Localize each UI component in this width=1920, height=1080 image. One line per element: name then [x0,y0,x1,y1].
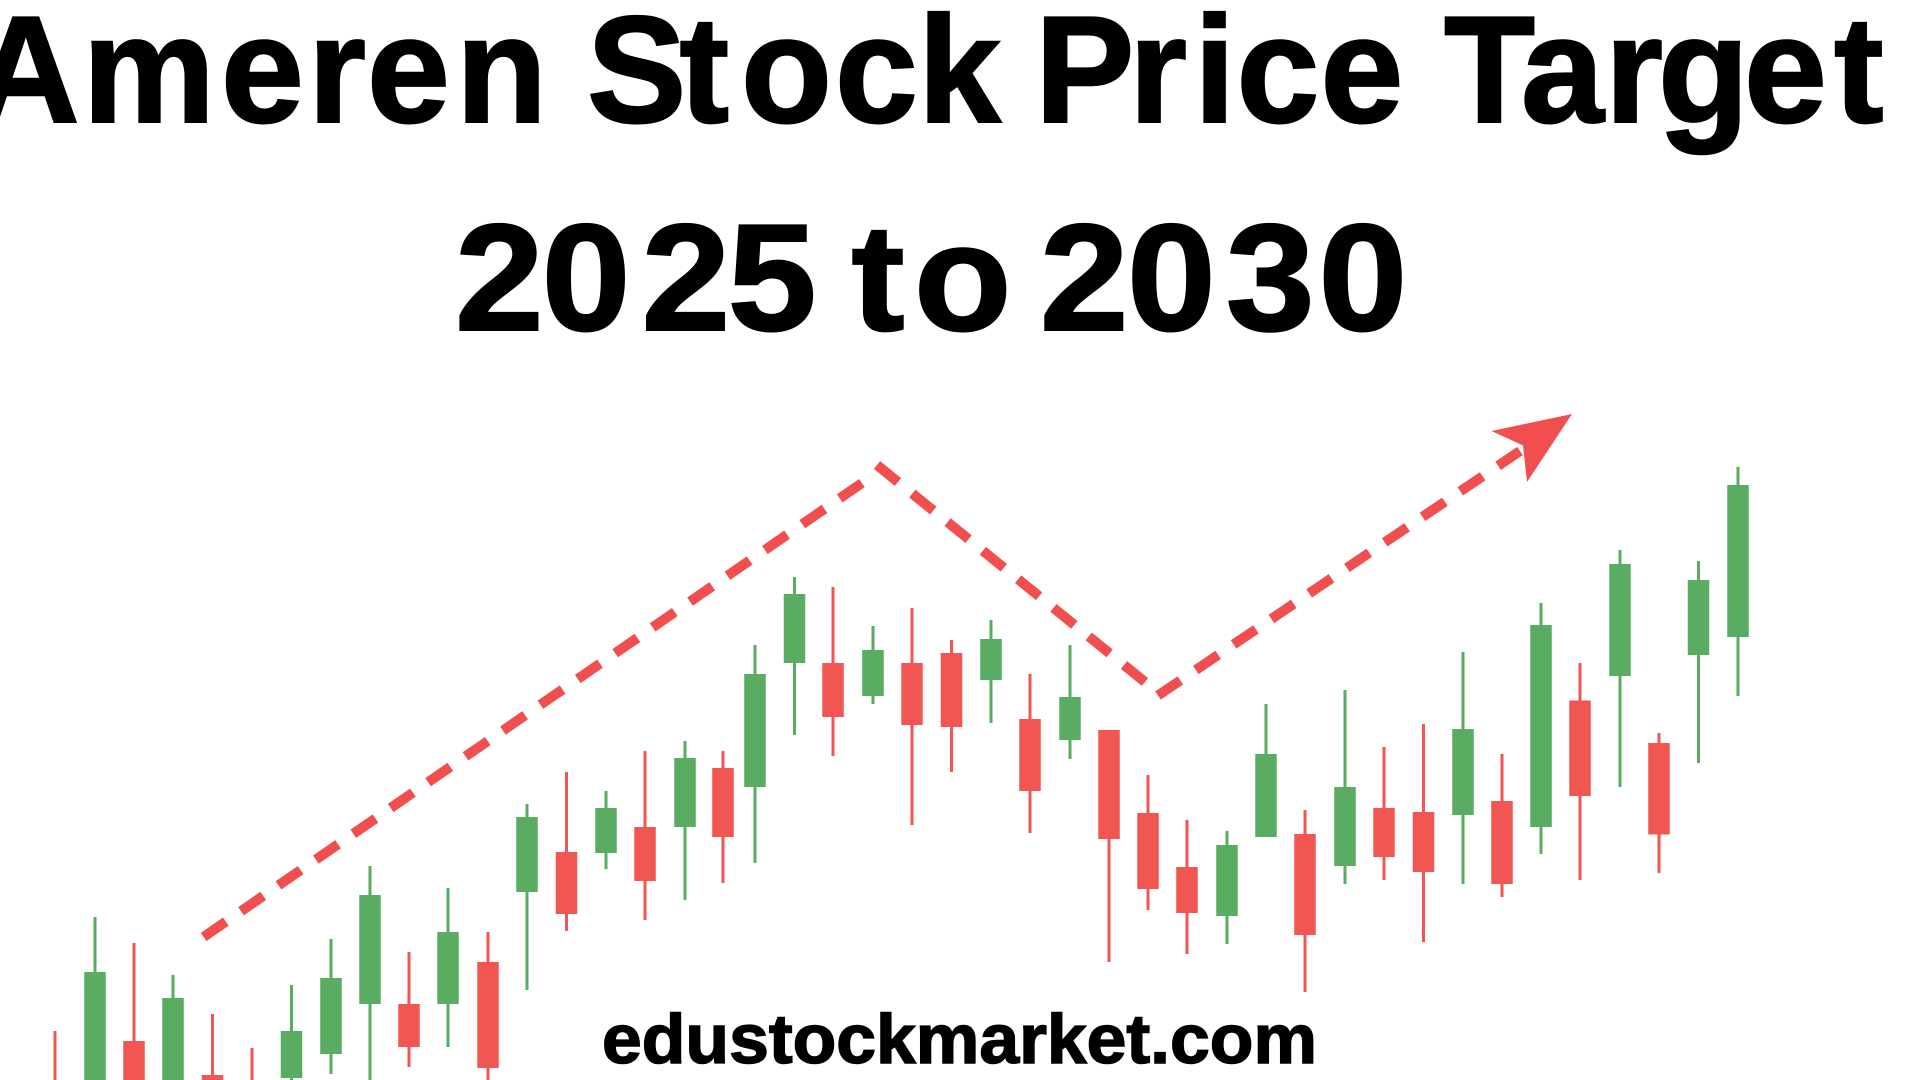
title: 2025 to 2030 [455,193,1407,363]
candle 41 [1609,550,1631,787]
candle 43 [1688,561,1709,763]
website label: edustockmarket.com [602,1000,1317,1078]
candle 37 [1452,652,1474,884]
candle 6 [250,1048,254,1080]
candle 30 [1176,820,1198,954]
candle 5 [202,1014,223,1080]
candle 15 [595,791,617,869]
candle 18 [712,751,734,883]
title [0,0,1884,363]
candle 28 [1098,730,1120,962]
candle 13 [516,804,538,990]
candle 36 [1413,724,1434,942]
candle 12 [477,932,499,1080]
candle 39 [1530,603,1552,854]
dashed trend arrow [204,414,1572,937]
candlestick chart [54,467,1749,1080]
candle 20 [784,577,805,735]
candle 42 [1648,733,1670,873]
candle 8 [320,939,342,1074]
candle 17 [674,741,696,900]
dashed line: final rising segment [1158,451,1520,696]
candle 27 [1059,645,1081,759]
arrowhead [1492,414,1572,482]
candle 23 [901,608,923,825]
candle 3 [123,943,145,1080]
candle 21 [822,587,844,756]
candle 4 [162,975,184,1080]
candle 10 [398,952,420,1067]
candle 40 [1569,663,1591,880]
candle 2 [84,917,106,1080]
candle 34 [1334,690,1356,884]
candle 9 [359,866,381,1080]
candle 24 [941,640,962,772]
candle 1 [54,1031,56,1080]
candle 29 [1137,775,1159,910]
candle 19 [744,645,766,863]
candle 31 [1216,831,1238,944]
candle 14 [556,772,577,931]
candle 7 [281,985,302,1080]
candle 33 [1294,810,1316,992]
candle 16 [634,751,656,920]
candle 22 [862,626,884,704]
candle 35 [1373,747,1395,880]
candle 38 [1491,754,1513,897]
candle 11 [437,888,459,1047]
candle 32 [1255,704,1277,837]
candle 26 [1019,674,1041,833]
dashed line: falling segment [877,465,1145,682]
dashed line: rising segment [204,483,862,937]
candle 25 [980,620,1002,723]
candle 44 [1727,467,1749,696]
